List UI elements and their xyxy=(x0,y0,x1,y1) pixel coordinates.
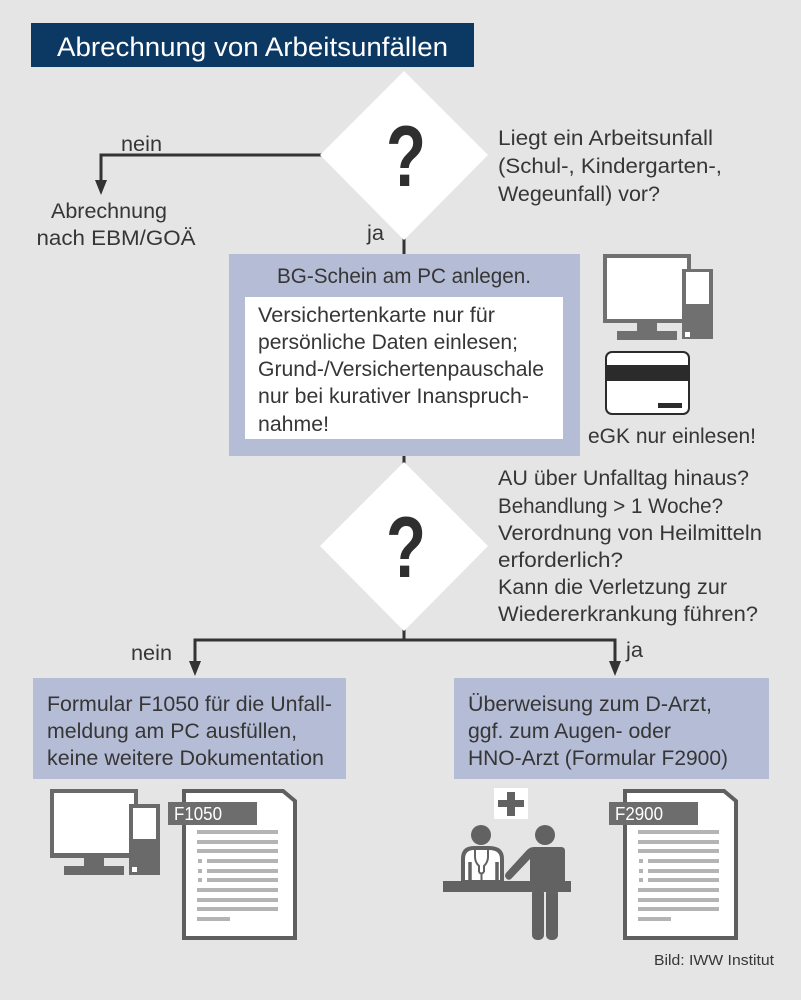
icon: document F1050: F1050 xyxy=(174,804,222,824)
panel: BG-Schein: persönliche Daten einlesen; xyxy=(258,331,518,354)
icon: document F2900: F2900 xyxy=(615,804,663,824)
panel: BG-Schein: Grund-/Versichertenpauschale xyxy=(258,358,544,381)
panel: Überweisung: Überweisung zum D-Arzt, xyxy=(468,693,712,716)
panel: BG-Schein xyxy=(229,254,580,456)
label: nein bottom: nein xyxy=(131,642,172,665)
icon: document F1050 xyxy=(168,791,295,938)
question text 2: erforderlich? xyxy=(498,549,623,572)
outcome: Abrechnung nach EBM/GOÄ: Abrechnung xyxy=(51,200,167,223)
decision diamond 2 xyxy=(320,462,488,631)
decision diamond 1 xyxy=(320,71,488,240)
label: nein top: nein xyxy=(121,133,162,156)
icon: computer top xyxy=(603,254,713,340)
panel: BG-Schein: Versichertenkarte nur für xyxy=(258,304,495,327)
credit: Bild: IWW Institut xyxy=(654,952,775,969)
label: ja top: ja xyxy=(366,222,384,245)
question text 2: Wiedererkrankung führen? xyxy=(498,603,758,626)
connector: vertical flow xyxy=(402,238,406,641)
panel: Überweisung: ggf. zum Augen- oder xyxy=(468,720,671,743)
panel: BG-Schein: nur bei kurativer Inanspruch- xyxy=(258,385,529,408)
question text 2 xyxy=(498,467,762,626)
decision diamond 2: ? xyxy=(386,500,426,596)
panel heading: BG-Schein am PC anlegen. xyxy=(277,265,531,288)
connector: decision 1 to nein xyxy=(95,155,322,195)
title: Abrechnung von Arbeitsunfällen xyxy=(57,32,448,62)
icon: doctor and patient xyxy=(443,788,571,940)
icon: computer bottom xyxy=(50,789,160,875)
panel: Formular F1050: keine weitere Dokumentation xyxy=(47,747,324,770)
question text 2: Behandlung > 1 Woche? xyxy=(498,495,723,518)
outcome: Abrechnung nach EBM/GOÄ: nach EBM/GOÄ xyxy=(36,227,196,250)
outcome: Abrechnung nach EBM/GOÄ xyxy=(36,200,196,250)
label: ja bottom: ja xyxy=(625,639,643,662)
question text 2: AU über Unfalltag hinaus? xyxy=(498,467,749,490)
panel: Formular F1050 xyxy=(33,678,346,779)
panel: Überweisung xyxy=(454,678,769,779)
panel: Formular F1050: Formular F1050 für die Unfall- xyxy=(47,693,332,716)
question text 2: Kann die Verletzung zur xyxy=(498,576,727,599)
question text 2: Verordnung von Heilmitteln xyxy=(498,522,762,545)
icon: insurance card xyxy=(605,352,690,414)
question text 1: Wegeunfall) vor? xyxy=(498,183,660,206)
icon: document F2900 xyxy=(609,791,736,938)
panel: Formular F1050: meldung am PC ausfüllen, xyxy=(47,720,297,743)
question text 1: (Schul-, Kindergarten-, xyxy=(498,155,722,178)
question text 1 xyxy=(498,127,722,206)
question text 1: Liegt ein Arbeitsunfall xyxy=(498,127,713,150)
decision diamond 1: ? xyxy=(386,109,426,205)
panel: BG-Schein: nahme! xyxy=(258,413,329,436)
icon: medical cross xyxy=(494,788,528,819)
title xyxy=(31,23,474,67)
panel: Überweisung: HNO-Arzt (Formular F2900) xyxy=(468,747,728,770)
caption: eGK: eGK nur einlesen! xyxy=(588,425,756,448)
connector: decision 2 branches xyxy=(189,640,621,676)
